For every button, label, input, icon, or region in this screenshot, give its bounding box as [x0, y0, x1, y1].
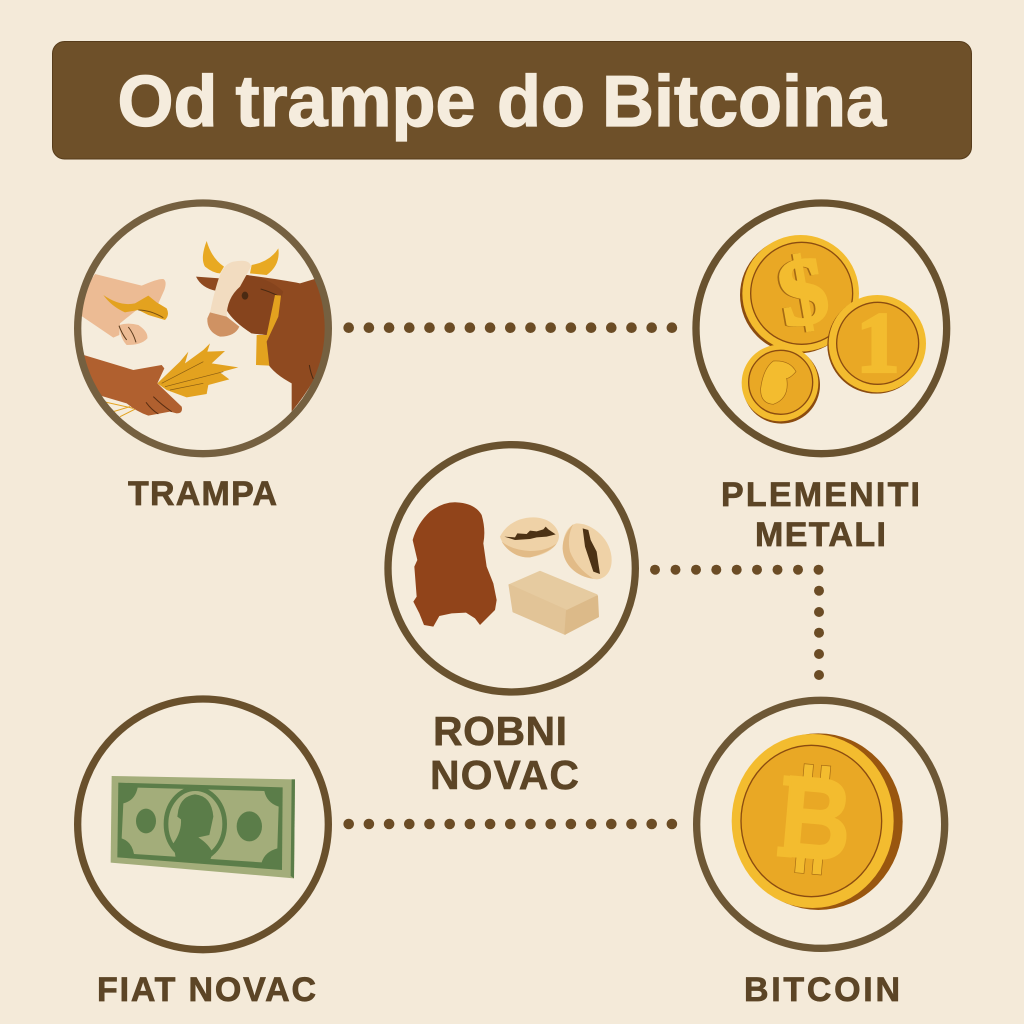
icon: gold coins [696, 203, 947, 454]
title banner: Bitcoina [602, 62, 887, 142]
title banner [52, 42, 972, 159]
label: robni novac: ROBNI [433, 708, 567, 754]
panel: robni novac [388, 445, 635, 798]
title banner: do [497, 62, 585, 142]
panel: bitcoin [697, 700, 945, 1009]
title banner: Od [118, 62, 217, 142]
icon: banknote [78, 699, 328, 950]
title banner: trampe [236, 62, 476, 142]
icon: gold coins: 1 [856, 295, 899, 391]
label: robni novac: NOVAC [430, 752, 579, 798]
icon: barter hands, wheat and cow [78, 203, 333, 454]
label: plemeniti metali: PLEMENITI [721, 476, 920, 514]
panel: trampa [78, 203, 333, 513]
icon: fur, shells and salt [388, 445, 635, 692]
icon: bitcoin coin [697, 700, 945, 948]
connector: commodity money to bitcoin [650, 565, 824, 680]
icon: gold coins: $ [770, 235, 836, 348]
label: trampa: TRAMPA [128, 475, 277, 513]
panel: plemeniti metali [696, 203, 947, 554]
label: bitcoin: BITCOIN [744, 971, 900, 1009]
label: robni novac [430, 708, 579, 798]
connector: fiat to bitcoin [343, 819, 677, 829]
icon: bitcoin coin: B [775, 752, 857, 886]
label: plemeniti metali: METALI [755, 516, 886, 554]
icon: gold coins: $ [769, 235, 834, 348]
connector: barter to precious metals [343, 322, 677, 333]
panel: fiat novac [78, 699, 328, 1009]
label: fiat novac: FIAT NOVAC [97, 971, 316, 1009]
label: plemeniti metali [721, 476, 920, 554]
